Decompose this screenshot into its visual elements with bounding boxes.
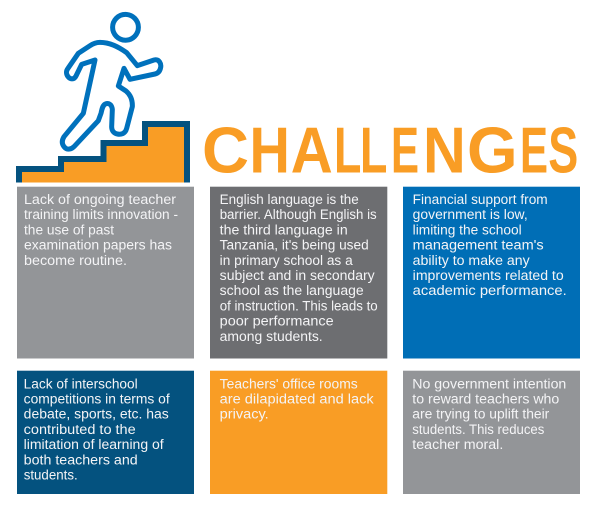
panel: office rooms: Teachers' office rooms [220,376,358,391]
panel: office rooms [210,371,387,494]
panel: teacher reward: No government intention [412,376,566,391]
panel: teacher training [17,187,194,358]
panel: English language barrier: English language is the [220,192,359,207]
panel: financial support: government is low, [413,207,528,222]
panel: teacher training: become routine. [24,253,127,268]
panel: teacher training: examination papers has [24,238,172,253]
panel: interschool competitions: contributed to the [24,422,136,437]
panel: English language barrier [210,187,387,358]
icon: person climbing stairs [16,14,190,183]
panel: interschool competitions: debate, sports, etc. has [24,407,169,422]
panel: teacher reward: students. This reduces [412,422,545,437]
title: G [467,113,518,186]
panel: English language barrier: barrier. Although English is [220,207,377,222]
icon: stairs [16,121,190,182]
panel: teacher reward: are trying to uplift their [412,407,550,422]
panel: interschool competitions: both teachers and [24,452,138,467]
panel: financial support: ability to make any [413,253,530,268]
title: N [423,113,466,186]
panel: financial support: limiting the school [413,222,522,237]
panel: financial support: academic performance. [413,283,567,298]
panel: English language barrier: among students. [220,329,323,344]
panel: interschool competitions [17,371,194,494]
panel: interschool competitions: competitions in terms of [24,392,170,406]
panel: financial support: management team's [413,238,544,253]
panel: financial support: improvements related to [413,268,564,283]
title: A [291,113,333,186]
panel: English language barrier: of instruction. This leads to [220,298,378,313]
panel: teacher training: training limits innovation - [24,207,178,222]
title: L [360,113,387,186]
icon: person head [113,14,138,40]
panel: English language barrier: in primary school as a [220,253,353,268]
panel: English language barrier: school as the language [220,283,364,298]
panel: interschool competitions: limitation of learning of [24,437,164,452]
icon: person body [62,42,161,149]
title: L [334,113,361,186]
title: E [391,113,419,186]
panel: teacher reward [403,371,580,494]
panel: English language barrier: Tanzania, it's being used [220,238,369,253]
panel: teacher training: Lack of ongoing teacher [24,192,177,207]
panel: English language barrier: the third language in [220,222,348,237]
panel: interschool competitions: Lack of interschool [24,376,138,391]
title: S [548,113,578,186]
panel: financial support: Financial support from [413,192,548,207]
panel: office rooms: are dilapidated and lack [220,392,374,406]
panel: teacher reward: to reward teachers who [412,392,559,406]
title: H [250,113,290,186]
panel: English language barrier: subject and in secondary [220,268,375,283]
panel: English language barrier: poor performance [220,314,334,329]
panel: financial support [403,187,580,358]
panel: office rooms: privacy. [220,407,269,422]
panel: teacher training: the use of past [24,222,114,237]
title: E [520,113,548,186]
panel: teacher reward: teacher moral. [412,437,503,452]
title: C [202,113,249,186]
panel: interschool competitions: students. [24,468,78,482]
